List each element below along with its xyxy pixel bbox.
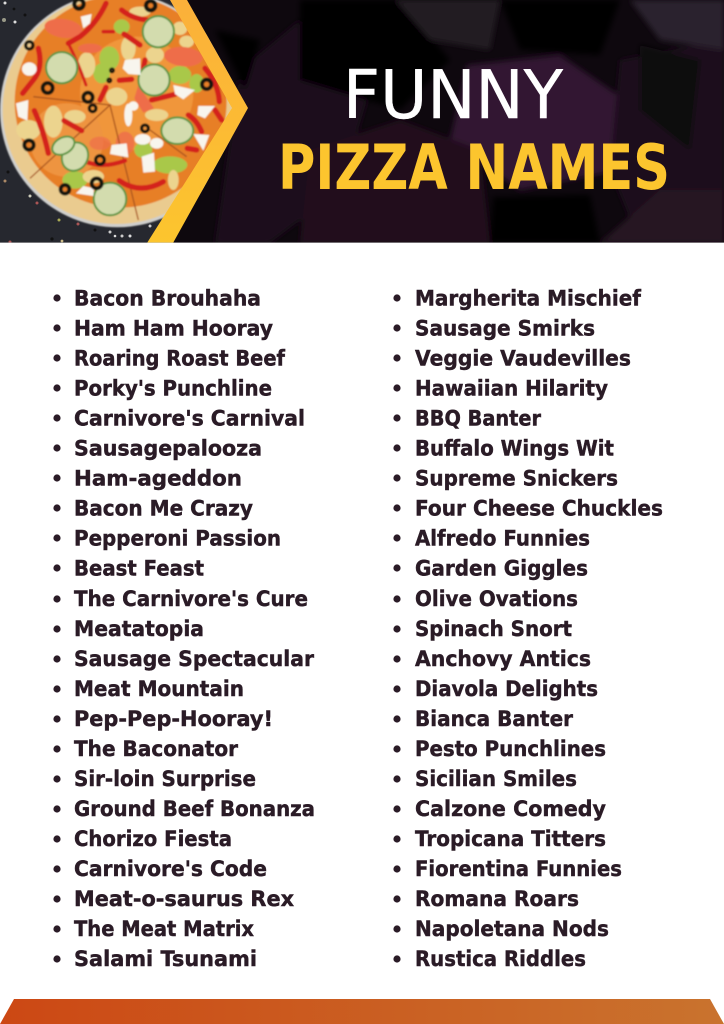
- feta: [16, 14, 215, 196]
- right names: Veggie Vaudevilles: [415, 346, 631, 370]
- right names: Margherita Mischief: [415, 286, 642, 310]
- left names: Sir-loin Surprise: [74, 767, 256, 791]
- left names: Meat-o-saurus Rex: [74, 887, 294, 911]
- right names: Calzone Comedy: [415, 797, 606, 821]
- olives: [24, 0, 211, 194]
- header banner: [0, 0, 724, 244]
- left names: The Meat Matrix: [74, 917, 254, 941]
- left names: Salami Tsunami: [74, 947, 257, 971]
- left names: Pep-Pep-Hooray!: [74, 707, 273, 731]
- left names: Porky's Punchline: [74, 376, 272, 400]
- right names: Hawaiian Hilarity: [415, 376, 608, 400]
- tomatoes: [43, 16, 203, 155]
- right names: Sicilian Smiles: [415, 767, 577, 791]
- pizza: [0, 0, 235, 227]
- left bullets: [53, 294, 61, 963]
- left names: Ham-ageddon: [74, 466, 242, 490]
- right names: Fiorentina Funnies: [415, 857, 622, 881]
- right name list: [393, 286, 663, 971]
- left names: Ham Ham Hooray: [74, 316, 273, 340]
- left names: [74, 286, 315, 971]
- table background behind pizza: [0, 0, 200, 242]
- yellow chevron: [147, 0, 248, 243]
- left name list: [53, 286, 315, 971]
- left names: Bacon Me Crazy: [74, 496, 253, 520]
- right names: Anchovy Antics: [415, 647, 591, 671]
- title: FUNNY: FUNNY: [343, 56, 564, 134]
- left names: The Carnivore's Cure: [74, 587, 308, 611]
- left names: Pepperoni Passion: [74, 526, 281, 550]
- left names: Chorizo Fiesta: [74, 827, 232, 851]
- right names: Buffalo Wings Wit: [415, 436, 614, 460]
- right names: Sausage Smirks: [415, 316, 595, 340]
- left names: Carnivore's Carnival: [74, 406, 305, 430]
- left names: Bacon Brouhaha: [74, 286, 261, 310]
- dark faceted background: [174, 0, 724, 242]
- left names: The Baconator: [74, 737, 239, 761]
- right names: Alfredo Funnies: [415, 526, 590, 550]
- footer orange bar: [0, 999, 724, 1024]
- left names: Meat Mountain: [74, 677, 244, 701]
- left names: Meatatopia: [74, 617, 204, 641]
- right names: Garden Giggles: [415, 556, 588, 580]
- right names: Napoletana Nods: [415, 917, 609, 941]
- red peppers: [23, 3, 222, 188]
- lettuce and onion shreds: [16, 7, 204, 190]
- left names: Beast Feast: [74, 556, 204, 580]
- left names: Roaring Roast Beef: [74, 346, 286, 370]
- right names: BBQ Banter: [415, 406, 542, 430]
- sprinkles: [2, 2, 152, 244]
- right names: Olive Ovations: [415, 587, 578, 611]
- right names: Four Cheese Chuckles: [415, 496, 663, 520]
- right names: Bianca Banter: [415, 707, 574, 731]
- cucumbers: [46, 16, 193, 215]
- header bottom edge: [0, 242, 724, 243]
- left names: Sausage Spectacular: [74, 647, 315, 671]
- right names: [415, 286, 663, 971]
- left names: Carnivore's Code: [74, 857, 267, 881]
- right names: Spinach Snort: [415, 617, 572, 641]
- right names: Tropicana Titters: [415, 827, 606, 851]
- right bullets: [393, 294, 401, 963]
- slice cuts: [30, 97, 187, 220]
- right names: Romana Roars: [415, 887, 579, 911]
- right names: Diavola Delights: [415, 677, 598, 701]
- right names: Supreme Snickers: [415, 466, 618, 490]
- right names: Pesto Punchlines: [415, 737, 606, 761]
- left names: Sausagepalooza: [74, 436, 262, 460]
- left names: Ground Beef Bonanza: [74, 797, 315, 821]
- right names: Rustica Riddles: [415, 947, 586, 971]
